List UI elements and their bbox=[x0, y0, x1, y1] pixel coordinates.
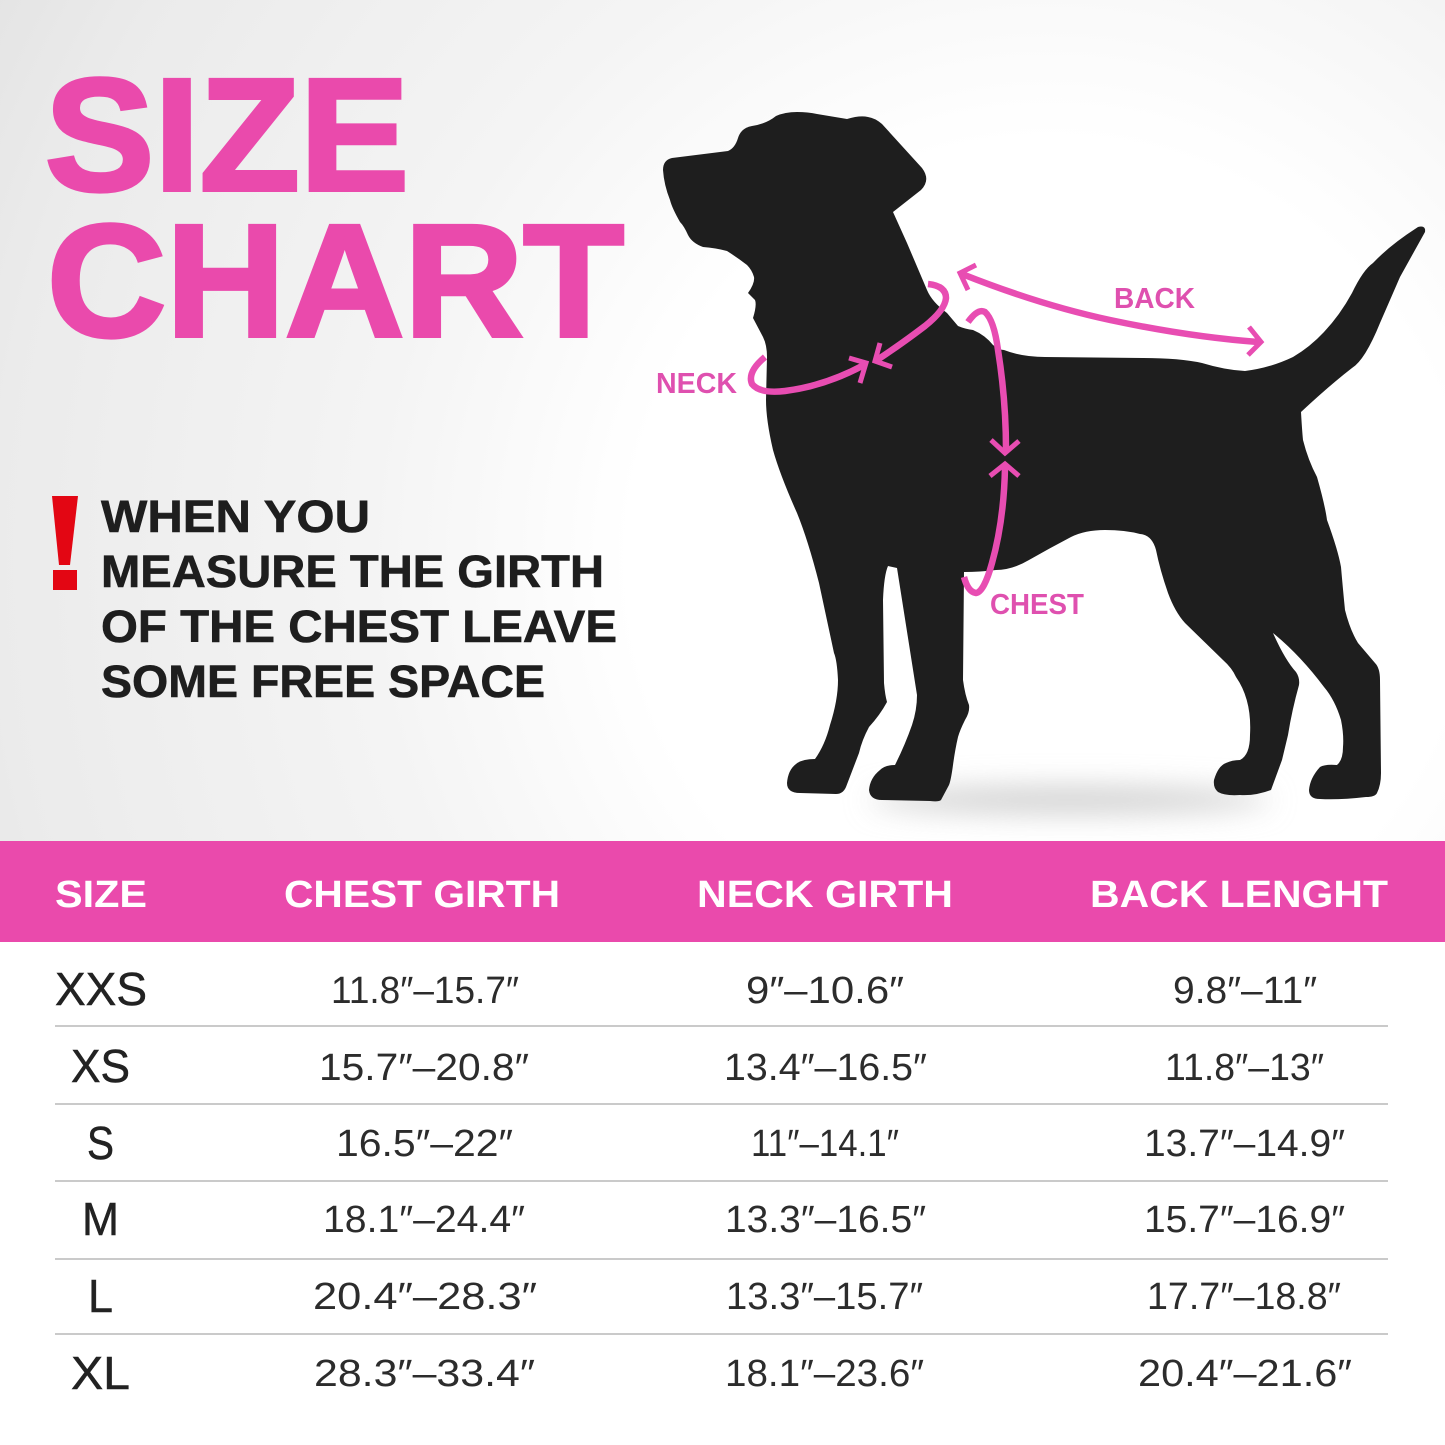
table row: XL: XL bbox=[71, 1347, 130, 1399]
table row: M: M bbox=[82, 1193, 119, 1245]
table row: S: S bbox=[87, 1117, 114, 1169]
neck measurement arrows bbox=[751, 284, 946, 392]
table row: XL bbox=[71, 1347, 1352, 1399]
table row dividers bbox=[55, 1026, 1388, 1334]
table row: XS: XS bbox=[71, 1040, 130, 1092]
table row: XXS: 9.8″–11″ bbox=[1173, 970, 1317, 1012]
table row: L: L bbox=[88, 1270, 113, 1322]
table header band: NECK GIRTH bbox=[697, 874, 953, 916]
table row: M: 18.1″–24.4″ bbox=[323, 1199, 525, 1241]
label: back: BACK bbox=[1114, 283, 1195, 315]
table row: XS: 11.8″–13″ bbox=[1165, 1047, 1324, 1089]
dog shadow bbox=[870, 787, 1270, 813]
title line: size: SIZE bbox=[45, 45, 409, 224]
measuring note bbox=[101, 491, 617, 707]
measuring note: WHEN YOU bbox=[101, 491, 370, 542]
table row: M: 15.7″–16.9″ bbox=[1144, 1199, 1345, 1241]
chest measurement arrows bbox=[964, 311, 1019, 593]
table row: XXS bbox=[55, 963, 1317, 1015]
background bbox=[0, 0, 1445, 842]
table row: XXS: 9″–10.6″ bbox=[746, 970, 904, 1012]
table header band: CHEST GIRTH bbox=[284, 874, 560, 916]
table row: L bbox=[88, 1270, 1341, 1322]
icon: exclamation mark bbox=[52, 496, 78, 590]
table row: XL: 20.4″–21.6″ bbox=[1138, 1353, 1352, 1395]
title bbox=[45, 45, 624, 370]
measuring note: OF THE CHEST LEAVE bbox=[101, 601, 617, 652]
table row: XL: 28.3″–33.4″ bbox=[314, 1353, 535, 1395]
table row: M bbox=[82, 1193, 1345, 1245]
table row: XS: 13.4″–16.5″ bbox=[724, 1047, 927, 1089]
table row: XL: 18.1″–23.6″ bbox=[725, 1353, 924, 1395]
table header band: BACK LENGHT bbox=[1090, 874, 1388, 916]
dog silhouette bbox=[663, 112, 1425, 801]
title line: chart: CHART bbox=[47, 191, 624, 370]
table row: L: 17.7″–18.8″ bbox=[1147, 1276, 1341, 1318]
label: neck: NECK bbox=[656, 368, 737, 400]
table row: L: 20.4″–28.3″ bbox=[313, 1276, 537, 1318]
table row: XS: 15.7″–20.8″ bbox=[319, 1047, 529, 1089]
table row: S bbox=[87, 1117, 1345, 1169]
table row: L: 13.3″–15.7″ bbox=[726, 1276, 923, 1318]
back measurement arrow bbox=[960, 265, 1261, 355]
table header band bbox=[0, 841, 1445, 942]
label: chest: CHEST bbox=[990, 589, 1084, 621]
table row: M: 13.3″–16.5″ bbox=[725, 1199, 926, 1241]
table row: XS bbox=[71, 1040, 1324, 1092]
table header band: SIZE bbox=[55, 874, 147, 916]
measuring note: SOME FREE SPACE bbox=[101, 656, 545, 707]
table row: XXS: 11.8″–15.7″ bbox=[331, 970, 519, 1012]
table row: S: 16.5″–22″ bbox=[336, 1123, 513, 1165]
table row: S: 13.7″–14.9″ bbox=[1144, 1123, 1345, 1165]
table row: XXS: XXS bbox=[55, 963, 147, 1015]
table row: S: 11″–14.1″ bbox=[751, 1123, 899, 1165]
measuring note: MEASURE THE GIRTH bbox=[101, 546, 604, 597]
